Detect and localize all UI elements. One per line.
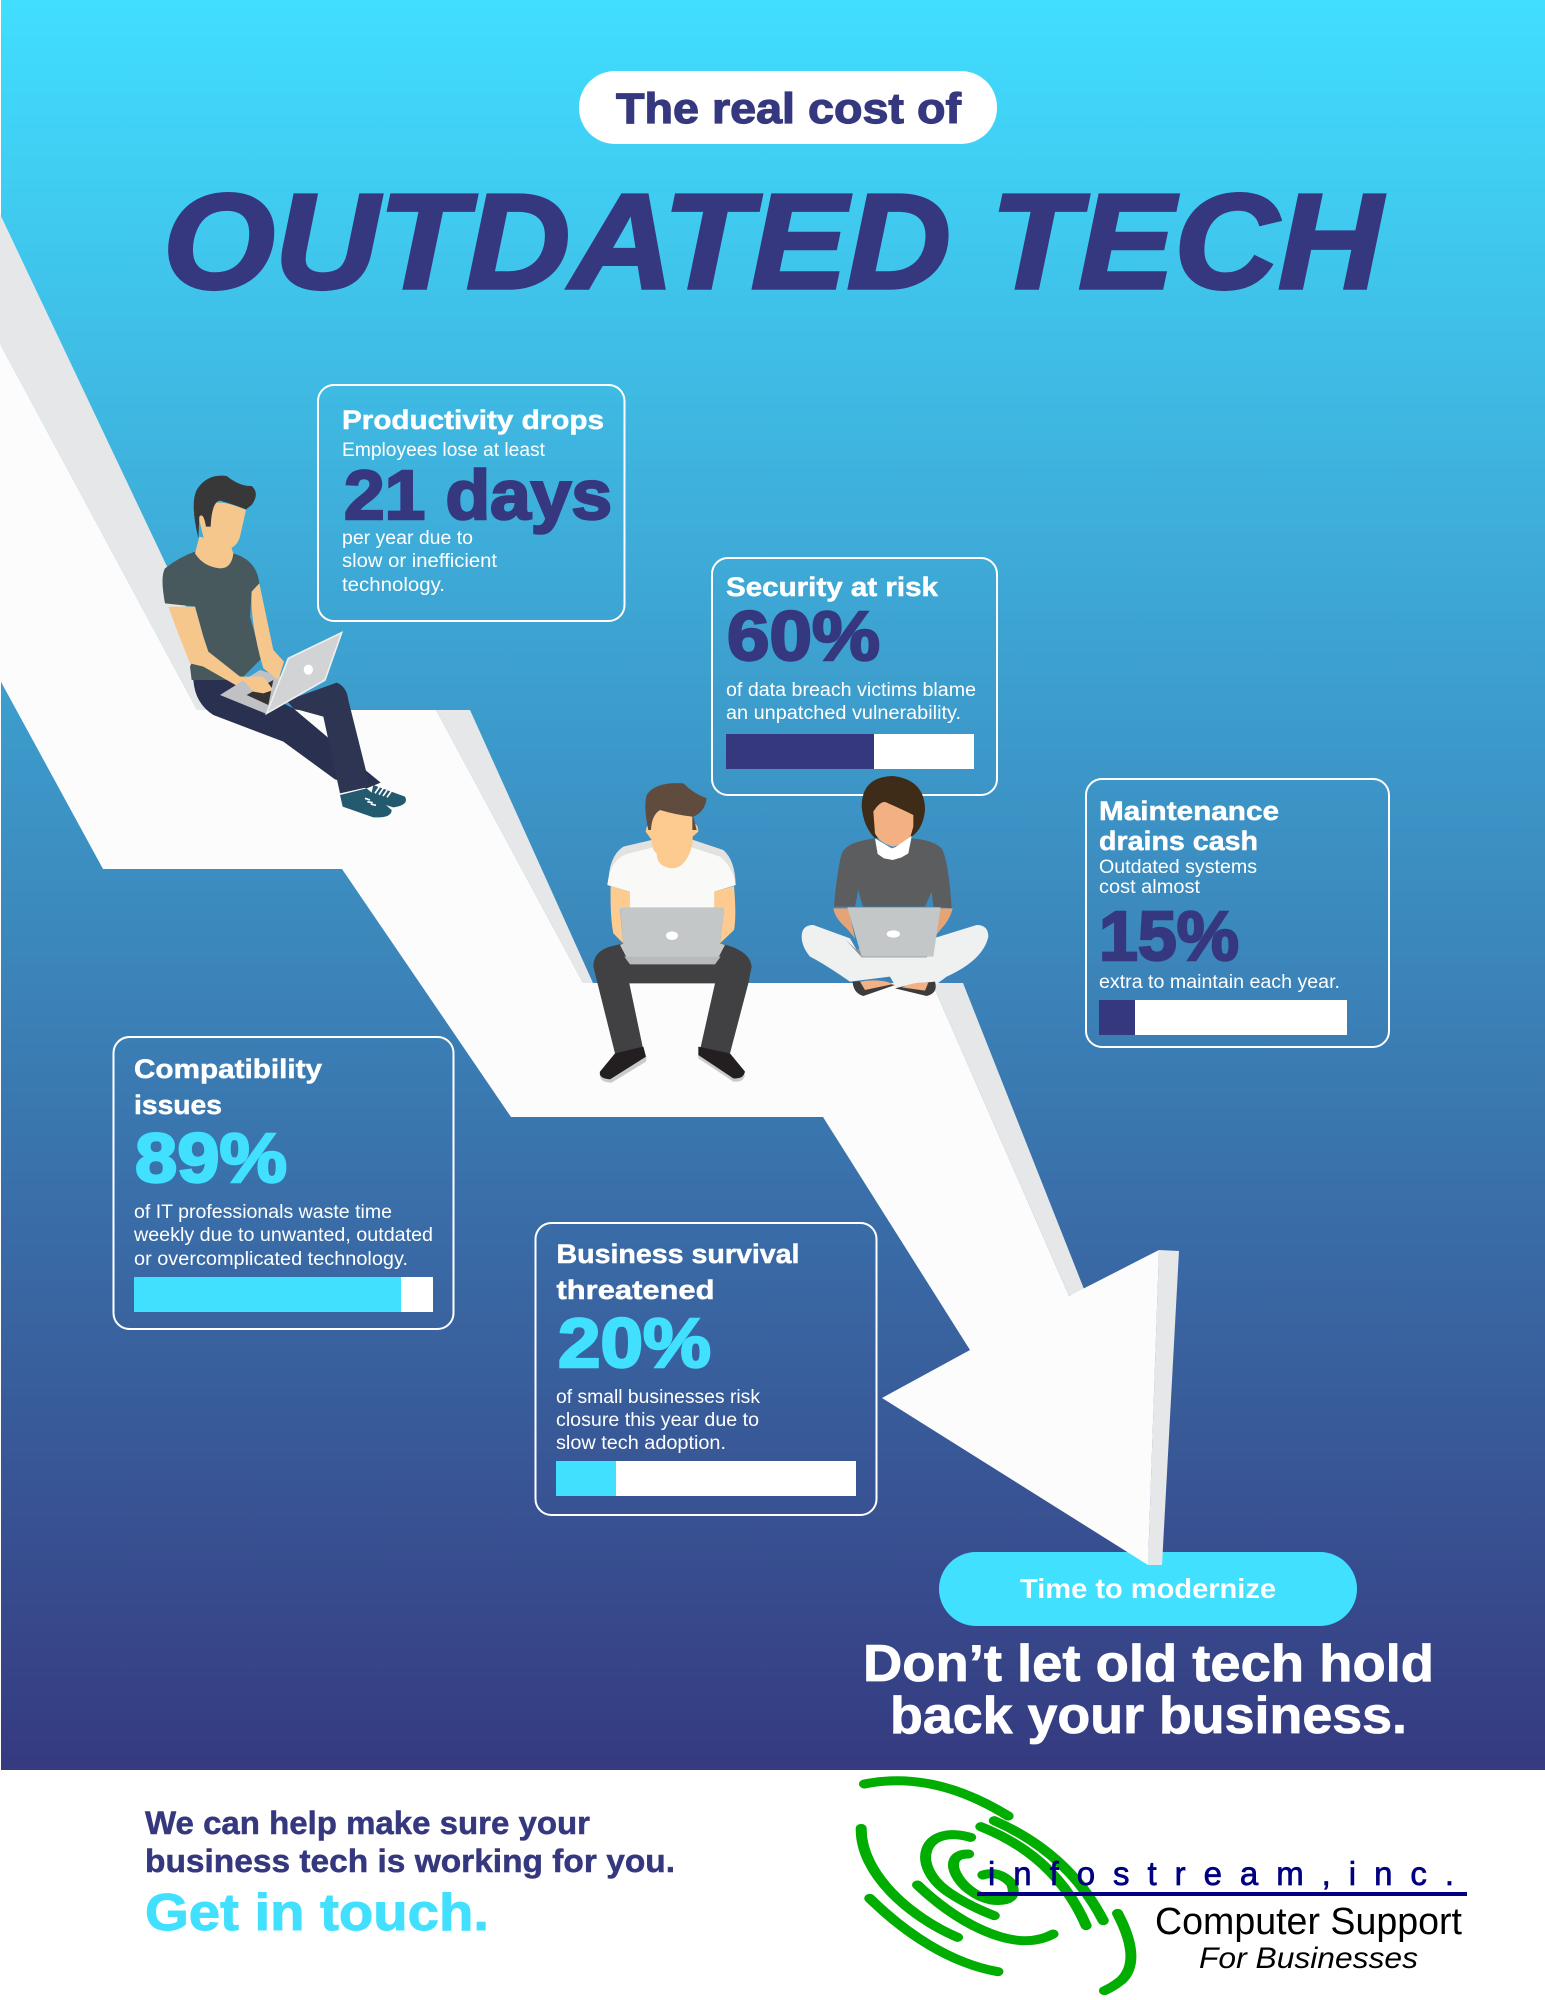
card: security at risk: of data breach victims blame — [726, 680, 976, 701]
card: maintenance drains cash — [1086, 779, 1389, 1047]
card: business survival threatened: slow tech adoption. — [556, 1433, 726, 1454]
collar — [875, 836, 912, 860]
shoes — [600, 1047, 745, 1083]
card: productivity drops — [318, 385, 624, 621]
main title: OUTDATED TECH — [163, 166, 1385, 317]
card: maintenance drains cash: extra to maintain each year. — [1099, 972, 1340, 993]
laptop — [220, 583, 342, 714]
call to action headline: Don’t let old tech hold — [863, 1635, 1434, 1693]
footer text: business tech is working for you. — [145, 1843, 675, 1879]
card: maintenance drains cash: Maintenance — [1099, 796, 1279, 826]
footer text: We can help make sure your — [145, 1805, 590, 1841]
laptop — [846, 907, 942, 957]
card: productivity drops: technology. — [342, 575, 445, 596]
card: maintenance drains cash: 15% — [1099, 897, 1239, 975]
person: man with laptop on the top ledge — [162, 476, 406, 817]
card: business survival threatened: 20% — [558, 1304, 711, 1382]
card: business survival threatened: closure this year due to — [556, 1410, 759, 1431]
infostream logo — [861, 1781, 1467, 1991]
person: man in white t-shirt with laptop — [593, 783, 752, 1083]
infostream logo: For Businesses — [1199, 1942, 1418, 1975]
call to action headline: back your business. — [890, 1687, 1407, 1745]
card: productivity drops: Productivity drops — [342, 405, 604, 435]
card: productivity drops: Employees lose at least — [342, 440, 546, 461]
card: compatibility issues: 89% — [135, 1119, 287, 1197]
time to modernize pill: Time to modernize — [1020, 1573, 1276, 1604]
time to modernize pill — [939, 1552, 1357, 1626]
card: maintenance drains cash: Outdated systems — [1099, 857, 1257, 878]
title pill: The real cost of — [616, 85, 962, 133]
footer text: Get in touch. — [145, 1884, 489, 1942]
card: maintenance drains cash: cost almost — [1099, 877, 1201, 898]
logo swirl — [861, 1781, 1131, 1991]
logo name: infostream,inc. — [988, 1855, 1454, 1892]
card: security at risk: an unpatched vulnerability. — [726, 703, 961, 724]
call to action headline — [863, 1635, 1434, 1745]
card: security at risk — [712, 558, 997, 795]
footer text — [145, 1805, 675, 1942]
card: compatibility issues: Compatibility — [134, 1054, 322, 1084]
card: security at risk: 60% — [727, 597, 880, 675]
laptop — [620, 907, 725, 964]
card: productivity drops: 21 days — [344, 456, 612, 534]
card: maintenance drains cash: drains cash — [1099, 826, 1258, 856]
card: productivity drops: slow or inefficient — [342, 551, 498, 572]
card: compatibility issues: weekly due to unwanted, outdated — [133, 1225, 433, 1246]
card: compatibility issues: or overcomplicated technology. — [134, 1249, 408, 1270]
infostream logo: Computer Support — [1155, 1901, 1462, 1943]
card: business survival threatened: threatened — [556, 1275, 714, 1305]
card: compatibility issues — [114, 1037, 454, 1329]
card: business survival threatened: of small businesses risk — [556, 1387, 761, 1408]
card: security at risk: Security at risk — [726, 572, 939, 602]
person: woman sitting cross-legged with laptop — [802, 776, 988, 996]
feet — [853, 980, 936, 996]
card: compatibility issues: issues — [134, 1090, 222, 1120]
card: business survival threatened — [536, 1223, 876, 1515]
card: productivity drops: per year due to — [342, 528, 473, 549]
title pill — [579, 71, 997, 144]
shoes — [340, 785, 406, 817]
downward arrow — [0, 214, 1179, 1565]
card: business survival threatened: Business survival — [556, 1239, 800, 1269]
card: compatibility issues: of IT professionals waste time — [134, 1202, 392, 1223]
